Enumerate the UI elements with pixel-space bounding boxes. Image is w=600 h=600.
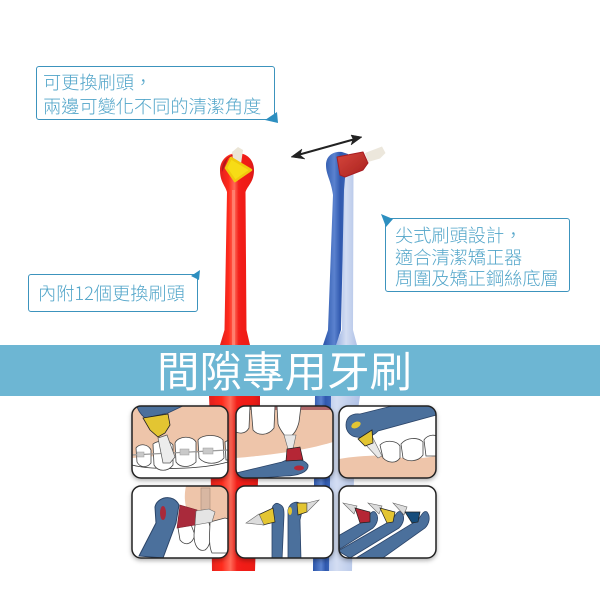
callout: replaceable brush head: 兩邊可變化不同的清潔角度 (43, 93, 261, 119)
panel: two brushes (236, 486, 333, 560)
callout: 12 heads included: 內附12個更換刷頭 (38, 280, 185, 306)
double arrow (291, 135, 362, 159)
panel: three colour brushes (338, 486, 436, 560)
panel: implant (132, 486, 232, 558)
panel: braces cleaning (132, 404, 232, 478)
title band: 間隙專用牙刷 (157, 350, 412, 397)
callout: tip design: 適合清潔矯正器 (395, 244, 522, 270)
callout: tip design (385, 218, 570, 292)
title band (0, 345, 600, 396)
panel: interdental teeth (232, 406, 333, 480)
callout: 12 heads included (28, 274, 198, 312)
red brush head: yellow cap (226, 158, 251, 181)
callout: replaceable brush head (36, 66, 275, 120)
panel: back molars (339, 406, 440, 478)
callout: tip design: 尖式刷頭設計， (395, 222, 522, 248)
callout: tip design: 周圍及矯正鋼絲底層 (395, 265, 559, 291)
blue brush head: white bristles (365, 146, 386, 162)
toothbrush: blue (313, 146, 386, 571)
blue brush head: red cap (337, 152, 368, 177)
callout: replaceable brush head: 可更換刷頭， (43, 69, 152, 95)
toothbrush: red (209, 147, 260, 571)
red brush head: white bristles (232, 147, 243, 164)
